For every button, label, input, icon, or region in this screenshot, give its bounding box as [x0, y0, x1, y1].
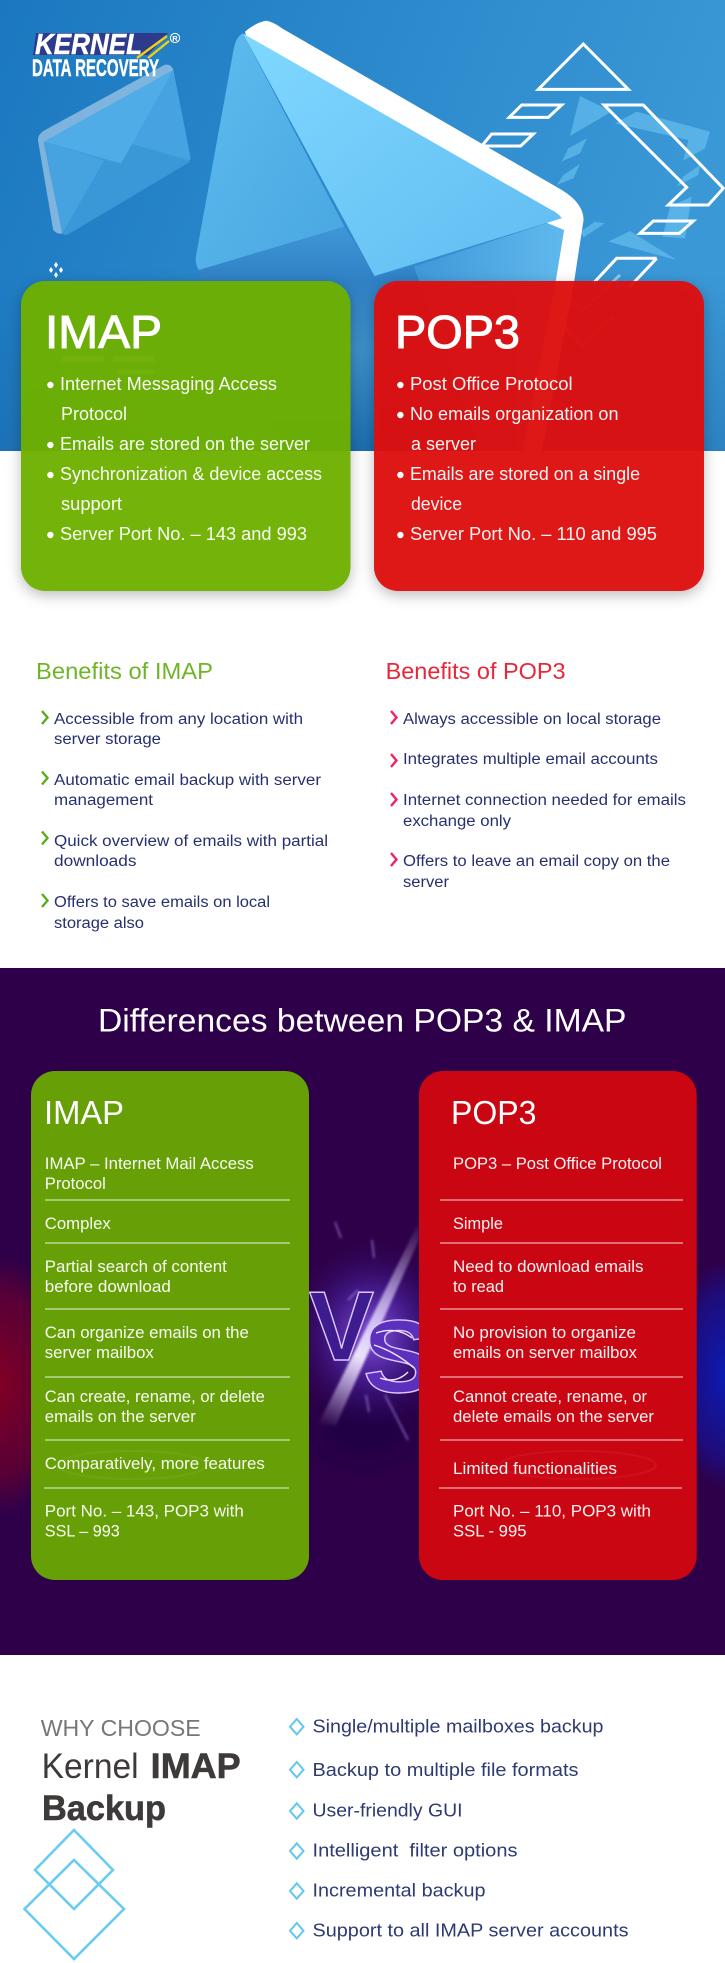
panel: POP3 summary card: [374, 281, 704, 591]
list: POP3 benefits: Always accessible on local storage: [403, 711, 661, 728]
panel: POP3 differences card: [419, 1071, 697, 1580]
logo: Kernel Data Recovery: KERNEL: [35, 29, 142, 61]
list: IMAP features: support: [61, 494, 122, 514]
list: POP3 differences: [439, 1155, 683, 1541]
list: IMAP differences: emails on the server: [45, 1408, 196, 1426]
list: POP3 differences: No provision to organize: [453, 1324, 636, 1342]
list: POP3 features: No emails organization on: [410, 404, 618, 424]
list: IMAP benefits: storage also: [54, 915, 144, 932]
panel: benefits of POP3: [386, 658, 686, 891]
list: IMAP differences: SSL – 993: [45, 1523, 120, 1541]
list: IMAP benefits: [54, 711, 328, 932]
list: product features: Backup to multiple file formats: [312, 1759, 578, 1780]
list: IMAP benefits: Accessible from any location with: [54, 711, 303, 728]
list: POP3 benefits: Offers to leave an email copy on the: [403, 853, 670, 870]
icon: small sparkle: [49, 262, 63, 278]
list: product features: Incremental backup: [312, 1880, 486, 1901]
list: POP3 differences: Cannot create, rename, or: [453, 1388, 648, 1406]
list: POP3 benefits: Integrates multiple email accounts: [403, 751, 658, 768]
icon: VS emblem: V: [309, 1271, 374, 1381]
list: IMAP differences: Complex: [45, 1215, 112, 1233]
list: POP3 features: Post Office Protocol: [410, 374, 573, 394]
list: IMAP benefits: server storage: [54, 731, 161, 748]
list: IMAP benefits: Quick overview of emails with partial: [54, 833, 328, 850]
panel: why choose heading: IMAP: [151, 1747, 241, 1786]
panel: why choose heading: WHY CHOOSE: [41, 1715, 201, 1741]
list: IMAP differences: Partial search of content: [45, 1258, 227, 1276]
list: IMAP features: Synchronization & device access: [60, 464, 322, 484]
list: POP3 features: Server Port No. – 110 and 995: [410, 524, 657, 544]
list: IMAP features: Server Port No. – 143 and 993: [60, 524, 307, 544]
list: POP3 features: [397, 374, 657, 544]
list: POP3 differences: to read: [453, 1278, 504, 1296]
logo: Kernel Data Recovery: [32, 29, 180, 82]
list: IMAP differences: Protocol: [45, 1175, 106, 1193]
list: POP3 benefits: Internet connection needed for emails: [403, 792, 686, 809]
list: IMAP features: [47, 374, 322, 544]
logo: Kernel Data Recovery: DATA RECOVERY: [32, 55, 159, 82]
list: POP3 benefits: exchange only: [403, 813, 511, 830]
panel: why choose heading: Kernel: [42, 1747, 139, 1786]
icon: VS emblem: [309, 1271, 435, 1414]
icon: diamond bullets: [290, 1719, 304, 1938]
icon: VS emblem: S: [363, 1299, 435, 1414]
panel: why choose heading: Backup: [42, 1789, 166, 1828]
list: POP3 benefits: server: [403, 874, 449, 891]
heading: IMAP: IMAP: [44, 1094, 124, 1131]
list: IMAP features: Internet Messaging Access: [60, 374, 277, 394]
icon: green chevrons: [42, 711, 48, 907]
list: POP3 benefits: [403, 711, 686, 891]
icon: pink chevrons: [391, 711, 396, 866]
faint ghost marks behind card: [62, 356, 155, 374]
list: POP3 differences: emails on server mailbox: [453, 1344, 638, 1362]
list: IMAP benefits: downloads: [54, 853, 137, 870]
list: IMAP benefits: management: [54, 792, 154, 809]
icon: large envelope: [196, 21, 584, 451]
panel: IMAP summary card: [21, 281, 350, 591]
logo: Kernel Data Recovery: R: [172, 34, 178, 43]
icon: outlined arrow shapes: [482, 44, 723, 347]
list: IMAP differences: server mailbox: [45, 1344, 155, 1362]
icon: overlapping diamonds: [24, 1830, 124, 1959]
list: IMAP differences: before download: [45, 1278, 171, 1296]
panel: differences section: [0, 968, 725, 1655]
list: IMAP differences: Can organize emails on the: [45, 1324, 249, 1342]
list: IMAP benefits: Offers to save emails on local: [54, 894, 270, 911]
list: IMAP differences: Comparatively, more features: [45, 1455, 265, 1473]
list: product features: Single/multiple mailboxes backup: [312, 1716, 604, 1737]
list: POP3 differences: Simple: [453, 1215, 503, 1233]
list: POP3 differences: Port No. – 110, POP3 with: [453, 1503, 651, 1521]
list: POP3 differences: SSL - 995: [453, 1523, 526, 1541]
list: product features: Intelligent filter options: [312, 1840, 518, 1861]
list: POP3 differences: Need to download emails: [453, 1258, 644, 1276]
list: POP3 features: Emails are stored on a single: [410, 464, 640, 484]
list: product features: Support to all IMAP server accounts: [312, 1920, 628, 1941]
list: POP3 differences: Limited functionalities: [453, 1460, 617, 1478]
list: IMAP differences: [44, 1155, 290, 1541]
heading: POP3: POP3: [395, 306, 520, 358]
list: IMAP benefits: Automatic email backup with server: [54, 772, 321, 789]
list: product features: User-friendly GUI: [312, 1800, 462, 1821]
heading: IMAP: IMAP: [45, 306, 162, 358]
panel: why choose heading: [41, 1715, 241, 1828]
list: POP3 features: device: [411, 494, 462, 514]
list: IMAP differences: Port No. – 143, POP3 with: [45, 1503, 244, 1521]
list: POP3 differences: delete emails on the server: [453, 1408, 655, 1426]
panel: benefits of IMAP: [36, 658, 328, 932]
list: product features: [290, 1716, 628, 1941]
heading: Benefits of IMAP: Benefits of IMAP: [36, 658, 213, 684]
panel: blue hero banner: [0, 0, 725, 451]
list: POP3 features: a server: [411, 434, 476, 454]
list: IMAP differences: Can create, rename, or delete: [45, 1388, 265, 1406]
panel: IMAP differences card: [31, 1071, 309, 1580]
list: IMAP features: Emails are stored on the server: [60, 434, 310, 454]
list: IMAP differences: IMAP – Internet Mail Access: [45, 1155, 254, 1173]
list: IMAP features: Protocol: [61, 404, 127, 424]
heading: Differences between POP3 & IMAP: Differences between POP3 & IMAP: [98, 1003, 626, 1039]
heading: POP3: POP3: [451, 1094, 536, 1131]
icon: small envelope: [38, 65, 191, 235]
list: POP3 differences: POP3 – Post Office Protocol: [453, 1155, 662, 1173]
heading: Benefits of POP3: Benefits of POP3: [386, 658, 566, 684]
